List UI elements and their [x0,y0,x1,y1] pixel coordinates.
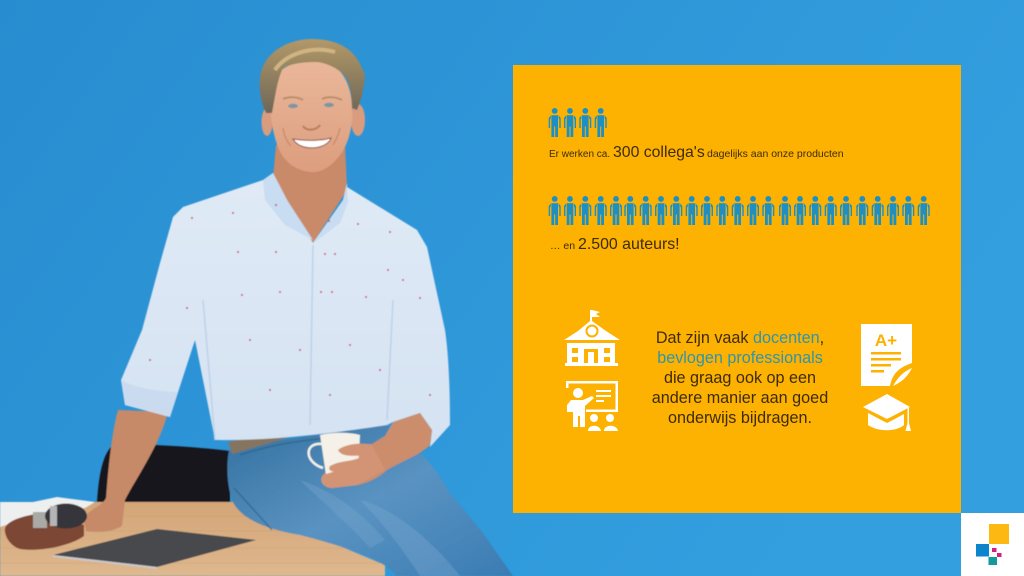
fingers [321,444,385,488]
mouth [293,138,331,148]
text: 2.500 auteurs: 2.500 auteurs! [578,236,680,253]
belt [228,408,388,454]
open book [0,497,95,527]
face [270,60,352,172]
head [260,39,365,172]
text: description: Dat zijn vaak docenten, [656,329,824,347]
text: 300 collega's: 300 collega's [613,144,705,161]
headphones [5,504,87,550]
ears [262,108,272,136]
chair [97,444,230,503]
text: 300 collega's: Er werken ca. [549,149,610,160]
panel: yellow info card [513,65,961,513]
photo: man sitting on desk [0,39,513,576]
eyes [288,104,298,108]
left arm [83,410,168,532]
text: description: andere manier aan goed [652,389,828,407]
desk [0,502,385,576]
icon: A+ paper [861,324,912,386]
smile lines [283,128,340,146]
icon row: 4 people [549,108,607,137]
logo [961,513,1024,576]
eyebrows [283,97,342,100]
text: 300 collega's: dagelijks aan onze producten [707,148,844,160]
icon: A+ paper: A+ [875,331,897,350]
text: 2.500 auteurs: … en [550,240,575,252]
icon: teacher at board [566,381,618,431]
neck [273,145,347,243]
hair [260,39,365,113]
jeans [227,425,513,576]
forearm and hand [321,413,432,488]
text: description [652,329,828,427]
icon row: 25 people [549,196,930,225]
text: description: bevlogen professionals [657,349,823,367]
icon: graduation cap [863,394,911,431]
tablet [53,529,256,567]
text: description: onderwijs bijdragen. [668,409,812,427]
text: description: die graag ook op een [664,369,816,387]
icon: school [564,310,620,366]
coffee mug [309,433,360,477]
shirt [121,173,450,447]
nose [303,125,320,130]
